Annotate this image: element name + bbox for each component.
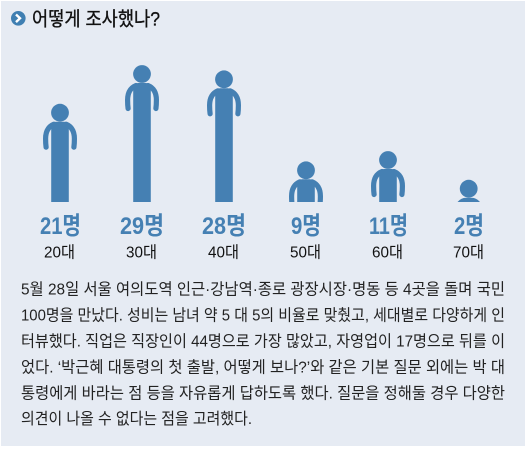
- figure: 70s: [458, 180, 480, 202]
- age label: 30s: 30대: [126, 244, 157, 262]
- text block: survey description: 었다. ‘박근혜 대통령의 첫 출발, 어떻게 보나?’와 같은 기본 질문 외에는 박 대: [21, 358, 505, 376]
- age label: 40s: 40대: [208, 244, 239, 262]
- count: 2: 2명: [454, 212, 484, 240]
- text block: survey description: 의견이 나올 수 없다는 점을 고려했다.: [21, 410, 252, 428]
- icon: chevron bullet: [11, 11, 26, 26]
- count: 29: 29명: [120, 212, 164, 240]
- count: 11: 11명: [369, 212, 408, 240]
- figure: 60s: [371, 151, 405, 202]
- heading: how was it surveyed: [11, 8, 160, 30]
- age label: 60s: 60대: [372, 244, 403, 262]
- chart: respondents by age group: [40, 65, 482, 260]
- count: 28: 28명: [202, 212, 246, 240]
- figure: 40s: [207, 70, 241, 202]
- figure: 30s: [125, 65, 159, 202]
- figure: 50s: [289, 161, 323, 202]
- count: 21: 21명: [40, 212, 81, 240]
- age label: 20s: 20대: [44, 244, 75, 262]
- heading text: 어떻게 조사했나?: [32, 8, 160, 30]
- text block: survey description: 100명을 만났다. 성비는 남녀 약 5 대 5의 비율로 맞췄고, 세대별로 다양하게 인: [21, 306, 505, 324]
- text block: survey description: [21, 280, 505, 428]
- age label: 70s: 70대: [453, 244, 484, 262]
- text block: survey description: 통령에게 바라는 점 등을 자유롭게 답하도록 했다. 질문을 정해둘 경우 다양한: [21, 384, 505, 402]
- text block: survey description: 5월 28일 서울 여의도역 인근·강남역·종로 광장시장·명동 등 4곳을 돌며 국민: [21, 280, 505, 298]
- age label: 50s: 50대: [290, 244, 321, 262]
- figure: 20s: [43, 104, 77, 202]
- text block: survey description: 터뷰했다. 직업은 직장인이 44명으로 가장 많았고, 자영업이 17명으로 뒤를 이: [21, 332, 505, 350]
- count: 9: 9명: [291, 212, 321, 240]
